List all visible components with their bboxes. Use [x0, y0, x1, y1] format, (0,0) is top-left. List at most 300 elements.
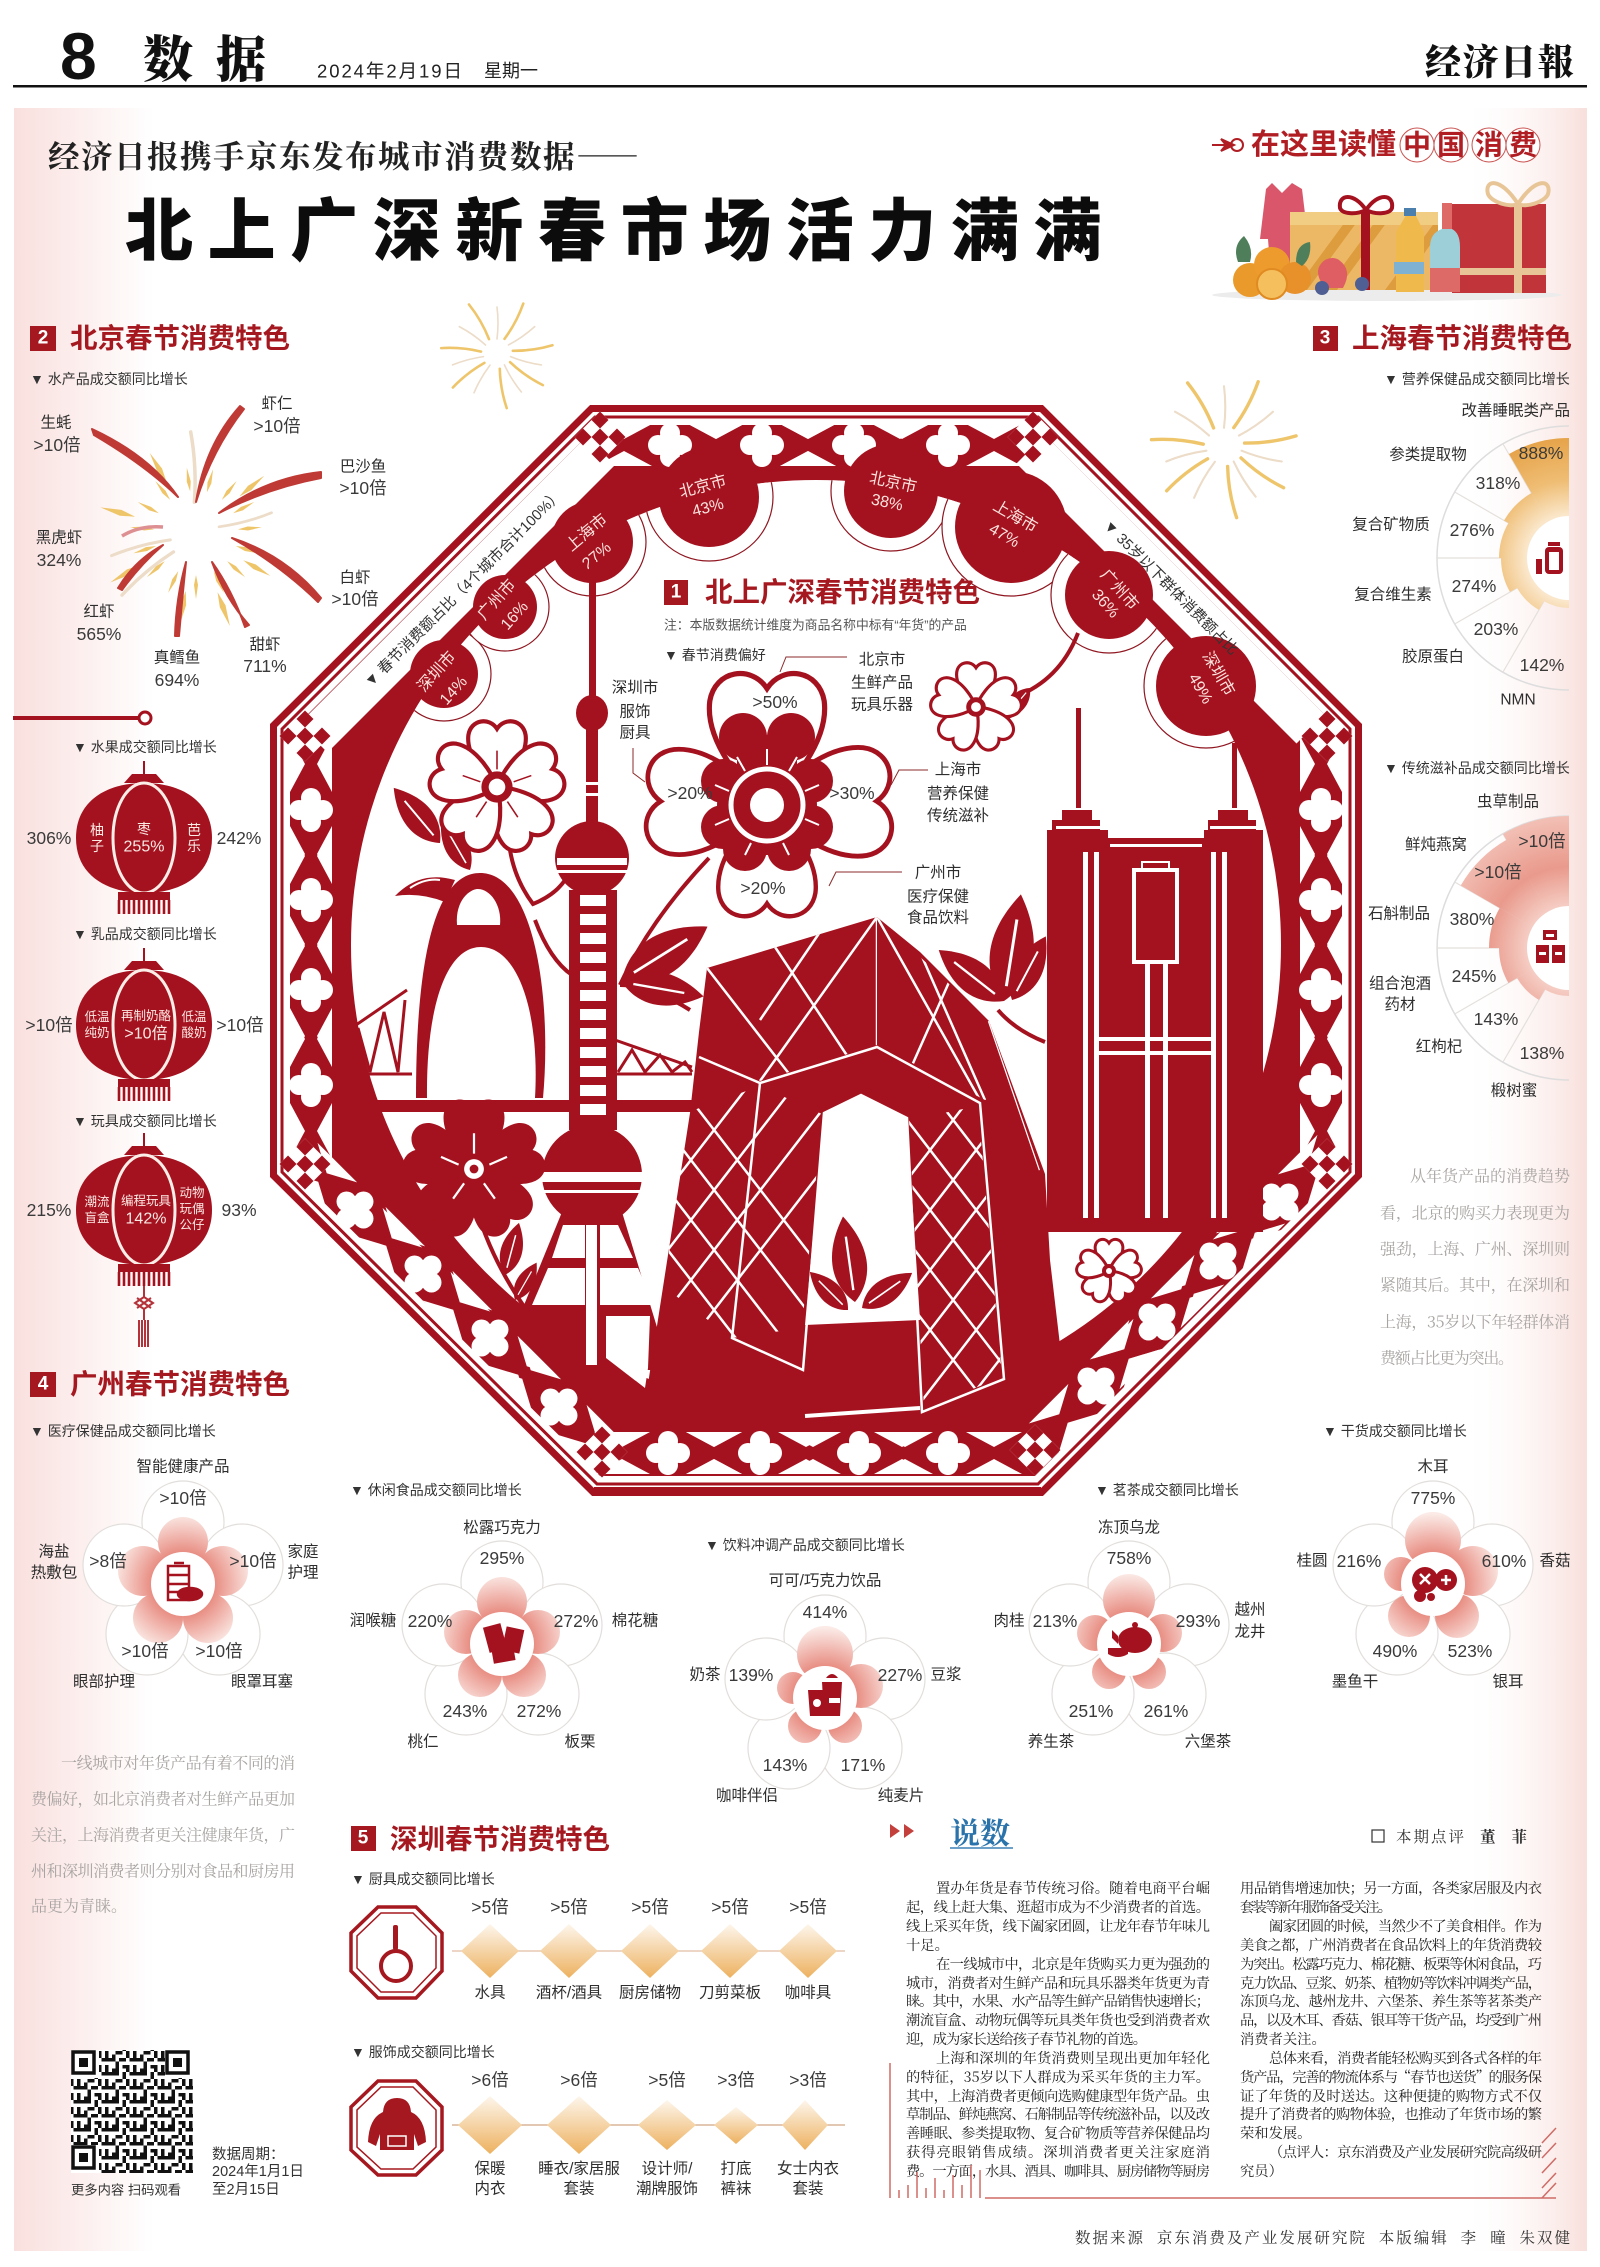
apparel row: >3倍	[717, 2070, 755, 2090]
values and labels: 142%	[1520, 655, 1564, 675]
kitchenware row: 刀剪菜板	[699, 1984, 761, 2002]
apparel row: >6倍	[560, 2070, 598, 2090]
text block: trend summary: 上海，35岁以下年轻群体消	[1380, 1310, 1570, 1332]
data period	[212, 2146, 304, 2198]
labels: 216%	[1337, 1551, 1381, 1571]
commentary column 2: （点评人：京东消费及产业发展研究院高级研	[1269, 2142, 1542, 2162]
apparel row: 套装	[563, 2180, 595, 2198]
values and labels: 245%	[1452, 966, 1496, 986]
scallop: Guangzhou 36%: 广州市	[1097, 566, 1142, 614]
kitchenware row	[452, 1897, 845, 2002]
scallop: Beijing 38%	[844, 444, 938, 538]
lantern: toys: 编程玩具	[121, 1193, 171, 1208]
commentary column 2: 用品销售增速加快；另一方面，各类家居服及内衣	[1240, 1878, 1542, 1898]
text block: preferences summary: 关注，上海消费者更关注健康年货，广	[31, 1822, 295, 1846]
labels: 可可/巧克力饮品	[769, 1572, 881, 1590]
labels: 智能健康产品	[136, 1458, 230, 1476]
commentary column 1: 迎，成为家长送给孩子春节礼物的首选。	[906, 2029, 1147, 2049]
labels: 243%	[443, 1701, 487, 1721]
newspaper logo: 经济日報	[1425, 34, 1575, 86]
lantern: toys: 142%	[126, 1210, 166, 1228]
flower chart: tea	[993, 1518, 1266, 1750]
flower callouts: 营养保健	[927, 784, 989, 802]
commentary column 1: 起，线上赶大集、逛超市成为不少消费者的首选。	[906, 1897, 1210, 1917]
labels: >10倍	[121, 1641, 169, 1661]
icon: dried mushrooms	[1412, 1567, 1457, 1602]
flower values: >20%	[667, 783, 713, 803]
labels: 护理	[287, 1564, 319, 1582]
labels: 热敷包	[31, 1562, 77, 1582]
labels: 171%	[841, 1755, 885, 1775]
slogan: read China consumption: 在这里读懂	[1251, 128, 1396, 161]
values and labels: 参类提取物	[1389, 446, 1467, 464]
apparel row: 女士内衣	[777, 2158, 839, 2178]
apparel row: 打底	[720, 2160, 752, 2178]
flower values: >30%	[829, 783, 875, 803]
lantern: toys: 公仔	[179, 1218, 205, 1232]
values and labels: 276%	[1450, 520, 1494, 540]
values and labels: 复合维生素	[1354, 586, 1432, 604]
lantern: fruit	[27, 761, 261, 914]
commentary column 1: 获得亮眼销售成绩。深圳消费者更关注家庭消	[906, 2142, 1210, 2162]
section heading 5: Shenzhen: 5	[358, 1828, 369, 1848]
scallop: Beijing 43%: 北京市	[677, 472, 728, 501]
labels: 养生茶	[1028, 1732, 1075, 1750]
flower chart: dried goods	[1296, 1458, 1571, 1690]
data period: 2024年1月1日	[212, 2163, 304, 2180]
scallop outlines	[414, 480, 1234, 749]
kitchenware row: 咖啡具	[785, 1984, 831, 2002]
labels: 295%	[480, 1548, 524, 1568]
kitchenware row: >5倍	[631, 1897, 669, 1917]
icon: teapot	[1108, 1622, 1152, 1657]
penguin	[395, 873, 545, 1098]
values and labels: 胶原蛋白	[1402, 648, 1464, 666]
labels: 家庭	[287, 1542, 319, 1560]
kitchenware row: >5倍	[550, 1897, 588, 1917]
slogan: read China consumption	[1212, 128, 1540, 162]
top lattice border	[596, 423, 1022, 467]
commentary frame ornaments	[890, 2063, 1556, 2198]
lantern: toys: 动物	[179, 1186, 205, 1200]
main title: 北上广深新春市场活力满满	[125, 194, 1116, 270]
strip label right: ▼ 35岁以下群体消费额占比	[1100, 517, 1241, 658]
scallop: Guangzhou 36%: 36%	[1088, 586, 1122, 622]
subheading: tea: ▼ 茗茶成交额同比增长	[1095, 1482, 1239, 1498]
labels: 松露巧克力	[463, 1518, 541, 1536]
section heading 3: Shanghai: 3	[1320, 328, 1330, 348]
commentary column 2: 套装等新年服饰备受关注。	[1240, 1897, 1392, 1917]
values and labels: 鲜炖燕窝	[1405, 836, 1467, 854]
slogan: read China consumption: 中	[1403, 130, 1431, 160]
scallop: Shenzhen 49%: 深圳市	[1199, 648, 1238, 699]
scallop: Shenzhen 14%: 深圳市	[414, 648, 459, 696]
values and labels: 380%	[1450, 909, 1494, 929]
commentary byline	[1372, 1825, 1543, 1847]
labels: 523%	[1448, 1641, 1492, 1661]
values and labels: 复合矿物质	[1352, 516, 1430, 534]
labels: 桃仁	[407, 1732, 439, 1750]
commentary column 1: 十足。	[906, 1935, 949, 1955]
flower callouts	[612, 650, 989, 926]
values and labels: 椴树蜜	[1491, 1082, 1537, 1100]
weekday: 星期一	[484, 61, 538, 81]
subheading: beverages: ▼ 饮料冲调产品成交额同比增长	[705, 1537, 905, 1553]
scallop: Shanghai 47%: 上海市	[990, 497, 1041, 536]
values and labels: 虫草制品	[1477, 792, 1539, 810]
labels: 咖啡伴侣	[716, 1786, 778, 1804]
labels: 纯麦片	[878, 1786, 924, 1804]
outline flower right	[928, 663, 1024, 754]
flower values: >50%	[752, 692, 798, 712]
lantern: toys	[27, 1133, 257, 1286]
labels: 565%	[77, 624, 121, 644]
lantern connector	[13, 712, 151, 724]
flower chart: snacks	[350, 1518, 658, 1750]
labels: 香菇	[1539, 1552, 1571, 1570]
labels: 木耳	[1417, 1458, 1449, 1476]
apparel row: >5倍	[648, 2070, 686, 2090]
subheading: dried goods: ▼ 干货成交额同比增长	[1323, 1423, 1467, 1439]
labels: 711%	[243, 656, 287, 676]
text block: trend summary: 紧随其后。其中，在深圳和	[1380, 1272, 1570, 1296]
small flower bottom-right	[1075, 1239, 1143, 1305]
values and labels: 143%	[1474, 1009, 1518, 1029]
lantern: dairy: 酸奶	[181, 1025, 207, 1040]
commentary column 2	[1240, 1878, 1543, 2181]
values and labels: 888%	[1519, 443, 1563, 463]
footer credits: 数据来源 京东消费及产业发展研究院 本版编辑 李 曈 朱双健	[1075, 2226, 1570, 2248]
kitchenware row: 厨房储物	[619, 1984, 681, 2002]
lantern: fruit: 柚	[90, 822, 104, 838]
red base with circular cut	[290, 425, 1342, 1476]
labels: 奶茶	[689, 1666, 721, 1684]
labels: 227%	[878, 1665, 922, 1685]
lantern: dairy: 低温	[84, 1010, 110, 1024]
apparel row: 套装	[792, 2180, 824, 2198]
subheading: medical: ▼ 医疗保健品成交额同比增长	[30, 1423, 216, 1439]
labels: 越州	[1234, 1600, 1266, 1618]
labels: 139%	[729, 1665, 773, 1685]
corner checkers	[280, 412, 1352, 1477]
CCTV building	[648, 917, 1060, 1418]
apparel row: 内衣	[474, 2180, 506, 2198]
labels: >10倍	[331, 589, 379, 609]
text block: trend summary	[1380, 1164, 1570, 1368]
polar chart: tonics	[1368, 792, 1569, 1100]
flower values: >20%	[740, 878, 786, 898]
kitchenware row: >5倍	[711, 1897, 749, 1917]
flower callouts: 医疗保健	[907, 888, 969, 906]
lantern: fruit: 255%	[124, 838, 164, 856]
section name: 数据	[143, 20, 289, 92]
labels: 巴沙鱼	[340, 458, 386, 476]
scallop: Shenzhen 49%: 49%	[1185, 671, 1215, 707]
commentary column 1: 费。一方面，水具、酒具、咖啡具、厨房储物等厨房	[906, 2161, 1210, 2181]
commentary heading: 说数	[950, 1809, 1010, 1853]
apparel row: 设计师/	[642, 2160, 693, 2178]
commentary column 1: 在一线城市中，北京是年货购买力更为强劲的	[936, 1954, 1210, 1974]
icon: bottle	[1536, 542, 1563, 574]
labels: 桂圆	[1296, 1552, 1328, 1570]
text block: preferences summary: 州和深圳消费者则分别对食品和厨房用	[31, 1858, 295, 1882]
page number: 8	[60, 19, 97, 93]
text block: preferences summary: 品更为青睐。	[31, 1894, 127, 1916]
text block: preferences summary: 一线城市对年货产品有着不同的消	[61, 1750, 295, 1774]
labels: 豆浆	[930, 1666, 962, 1684]
subheading: traditional tonics: ▼ 传统滋补品成交额同比增长	[1384, 760, 1570, 776]
flower callouts: 生鲜产品	[851, 674, 913, 692]
commentary column 2: 总体来看，消费者能轻松购买到各式各样的年	[1269, 2048, 1542, 2068]
labels: 墨鱼干	[1332, 1672, 1378, 1690]
bridge	[352, 990, 692, 1112]
QR code	[71, 2050, 193, 2173]
values and labels: 组合泡酒	[1369, 974, 1431, 992]
date: 2024年2月19日	[317, 60, 462, 82]
labels	[689, 1572, 962, 1804]
labels: 610%	[1482, 1551, 1526, 1571]
flower callouts: 服饰	[619, 702, 651, 720]
commentary column 2: 消费者关注。	[1240, 2029, 1326, 2049]
labels: 324%	[37, 550, 81, 570]
pearl tower	[522, 560, 670, 1388]
subheading: preference: ▼ 春节消费偏好	[664, 647, 766, 663]
values and labels: 红枸杞	[1416, 1038, 1462, 1056]
labels: 海盐	[38, 1542, 70, 1560]
labels	[993, 1518, 1266, 1750]
labels	[1296, 1458, 1571, 1690]
labels: >10倍	[195, 1641, 243, 1661]
flower callouts: 厨具	[619, 724, 651, 742]
commentary column 2: 美食之都，广州消费者在食品饮料上的年货消费较	[1240, 1935, 1543, 1955]
lantern: fruit: 242%	[217, 828, 261, 848]
flower callouts: 北京市	[859, 650, 905, 668]
values and labels: 203%	[1474, 619, 1518, 639]
labels: 红虾	[83, 602, 115, 620]
scallop: Shanghai 47%	[955, 471, 1067, 583]
stems and leaves	[474, 633, 1078, 1315]
scallop: Beijing 38%: 38%	[870, 491, 904, 515]
lantern: dairy: 纯奶	[84, 1026, 110, 1040]
labels: 白虾	[339, 568, 371, 586]
commentary column 2: 克力饮品、豆浆、奶茶、植物奶等饮料冲调类产品，	[1240, 1973, 1542, 1993]
subheading: fruit: ▼ 水果成交额同比增长	[73, 739, 217, 755]
apparel row	[452, 2070, 845, 2198]
commentary column 2: 阖家团圆的时候，当然少不了美食相伴。作为	[1269, 1916, 1542, 1936]
firework right	[1151, 382, 1296, 518]
scallop: Guangzhou 16%: 广州市	[474, 576, 519, 624]
labels: >10倍	[253, 416, 301, 436]
labels: 虾仁	[261, 394, 293, 412]
lantern: toys: 玩偶	[179, 1202, 205, 1216]
commentary column 1: 的特征，35岁以下人群成为采买年货的主力军。	[906, 2067, 1210, 2087]
lantern: toys: 93%	[221, 1200, 257, 1220]
commentary byline: 董菲	[1480, 1825, 1543, 1847]
text block: trend summary: 看，北京的购买力表现更为	[1380, 1200, 1570, 1224]
labels	[350, 1518, 658, 1750]
commentary column 1: 其中，上海消费者更倾向选购健康型年货产品。虫	[906, 2086, 1211, 2106]
commentary column 1: 线上采买年货，线下阖家团圆，让龙年春节年味儿	[906, 1916, 1210, 1936]
flower callouts: 玩具乐器	[851, 696, 913, 714]
slogan: read China consumption: 消	[1475, 130, 1503, 160]
commentary column 1: 上海和深圳的年货消费则呈现出更加年轻化	[936, 2048, 1210, 2068]
outline flower left	[426, 721, 568, 857]
values and labels: >10倍	[1518, 831, 1566, 851]
flower callouts: 传统滋补	[927, 806, 989, 824]
labels: 251%	[1069, 1701, 1113, 1721]
scallop: Beijing 43%: 43%	[690, 496, 726, 520]
leaves	[383, 682, 1058, 1304]
labels: 真鳕鱼	[154, 648, 200, 666]
labels: 414%	[803, 1602, 847, 1622]
apparel row: >6倍	[471, 2070, 509, 2090]
values and labels: >10倍	[1474, 862, 1522, 882]
values and labels: 石斛制品	[1368, 904, 1430, 922]
icon: hoodie badge	[351, 2081, 442, 2175]
commentary byline: 本期点评	[1396, 1825, 1466, 1847]
commentary column 1: 置办年货是春节传统习俗。随着电商平台崛	[936, 1878, 1210, 1898]
commentary column 1: 睐。其中，水果、水产品等生鲜产品销售快速增长；	[906, 1991, 1210, 2011]
labels: 261%	[1144, 1701, 1188, 1721]
scallop: Guangzhou 36%	[1065, 551, 1153, 639]
lantern: dairy: >10倍	[25, 1015, 73, 1035]
slogan: read China consumption: 国	[1437, 130, 1465, 160]
labels: >10倍	[33, 435, 81, 455]
scallop: Shenzhen 14%: 14%	[437, 673, 471, 709]
commentary column 1: 潮流盲盒、动物玩偶等玩具类年货也受到消费者欢	[906, 2010, 1210, 2030]
firework chart: aquatic products	[33, 394, 387, 690]
subheading: apparel: ▼ 服饰成交额同比增长	[351, 2044, 495, 2060]
labels: 272%	[517, 1701, 561, 1721]
labels	[31, 1458, 319, 1690]
labels: 272%	[554, 1611, 598, 1631]
labels: >10倍	[159, 1488, 207, 1508]
lantern: toys: 潮流	[84, 1194, 110, 1209]
values and labels: NMN	[1500, 692, 1536, 708]
labels: 冻顶乌龙	[1098, 1518, 1160, 1536]
labels: 758%	[1107, 1548, 1151, 1568]
subheading: dairy: ▼ 乳品成交额同比增长	[73, 926, 217, 942]
commentary column 1	[906, 1878, 1211, 2181]
text block: trend summary: 强劲，上海、广州、深圳则	[1380, 1236, 1570, 1260]
kitchenware row: >5倍	[789, 1897, 827, 1917]
labels: 肉桂	[993, 1612, 1025, 1630]
commentary column 2: 究员）	[1240, 2161, 1283, 2181]
kitchenware row: >5倍	[471, 1897, 509, 1917]
labels: 眼罩耳塞	[231, 1672, 293, 1690]
left lattice border	[289, 736, 333, 1159]
text block: preferences summary	[31, 1750, 295, 1916]
polar chart: nutrition	[1352, 402, 1570, 708]
text block: preferences summary: 费偏好，如北京消费者对生鲜产品更加	[31, 1786, 295, 1810]
commentary column 1: 草制品、鲜炖燕窝、石斛制品等传统滋补品，以及改	[906, 2104, 1210, 2124]
lantern: fruit: 子	[90, 838, 104, 854]
subheading: nutrition: ▼ 营养保健品成交额同比增长	[1384, 371, 1570, 387]
commentary column 2: 证了年货的及时送达。这种便捷的购物方式不仅	[1240, 2086, 1542, 2106]
lantern: toys: 盲盒	[84, 1210, 110, 1225]
lantern knot and tassel	[135, 1286, 153, 1347]
section heading 2: Beijing: 北京春节消费特色	[70, 322, 290, 354]
flower chart: medical	[31, 1458, 319, 1690]
labels: 棉花糖	[612, 1612, 658, 1630]
masthead	[13, 19, 1587, 93]
data period: 数据周期：	[212, 2146, 284, 2163]
flower values	[667, 692, 875, 898]
red flower lower-left	[398, 1099, 550, 1243]
text block: trend summary: 费额占比更为突出。	[1380, 1346, 1514, 1368]
flower callouts: 广州市	[915, 864, 961, 882]
scallop: Shenzhen 49%	[1156, 636, 1256, 736]
values and labels: 318%	[1476, 473, 1520, 493]
labels: 490%	[1373, 1641, 1417, 1661]
scallop: Shanghai 27%	[551, 501, 633, 583]
labels: 143%	[763, 1755, 807, 1775]
lower-left lattice border	[287, 1142, 627, 1475]
section heading 1: 北上广深春节消费特色	[705, 576, 980, 608]
commentary column 2: 货产品，完善的物流体系与“春节也送货”的服务保	[1240, 2067, 1542, 2087]
lantern: dairy: 再制奶酪	[121, 1008, 171, 1023]
labels: 生蚝	[40, 414, 72, 432]
right lattice border	[1299, 736, 1343, 1159]
flower chart: beverages	[689, 1572, 962, 1804]
QR caption: 更多内容 扫码观看	[71, 2182, 181, 2198]
commentary column 1: 城市，消费者对生鲜产品和玩具乐器类年货更为青	[906, 1973, 1210, 1993]
section heading 3: Shanghai: 上海春节消费特色	[1352, 322, 1572, 354]
values and labels	[1368, 792, 1566, 1100]
values and labels: 274%	[1452, 576, 1496, 596]
labels: 694%	[155, 670, 199, 690]
lantern: dairy: 低温	[181, 1010, 207, 1024]
lantern: toys: 215%	[27, 1200, 71, 1220]
icon: red packets	[483, 1623, 524, 1664]
data period: 至2月15日	[212, 2182, 280, 2198]
lantern: fruit: 芭	[187, 822, 201, 838]
labels: 213%	[1033, 1611, 1077, 1631]
section heading 4: Guangzhou: 广州春节消费特色	[70, 1368, 290, 1400]
subtitle: 经济日报携手京东发布城市消费数据——	[48, 132, 641, 178]
illustration: gifts	[1212, 183, 1562, 301]
labels: 775%	[1411, 1488, 1455, 1508]
section heading 4: Guangzhou: 4	[38, 1374, 49, 1394]
apparel row: 裤袜	[720, 2180, 752, 2198]
apparel row: 潮牌服饰	[636, 2180, 698, 2198]
commentary column 2: 品，以及木耳、香菇、银耳等干货产品，均受到广州	[1240, 2010, 1542, 2030]
paper-cut octagon	[274, 408, 1358, 1496]
scallop: Shanghai 27%: 上海市	[563, 510, 611, 555]
scallop: Beijing 43%	[659, 447, 759, 547]
values and labels	[1352, 402, 1570, 708]
kitchenware row: 酒杯/酒具	[536, 1984, 602, 2002]
labels: 黑虎虾	[36, 528, 82, 546]
subheading: kitchenware: ▼ 厨具成交额同比增长	[351, 1871, 495, 1887]
scallop: Shanghai 27%: 27%	[579, 539, 615, 573]
commentary column 1: 善睡眠、参类提取物、复合矿物质等营养保健品均	[906, 2123, 1210, 2143]
kitchenware row: 水具	[474, 1984, 506, 2002]
subheading: aquatic: ▼ 水产品成交额同比增长	[30, 371, 188, 387]
labels: 220%	[408, 1611, 452, 1631]
apparel row: 保暖	[474, 2160, 506, 2178]
scallop: Shenzhen 14%	[410, 640, 478, 709]
lower-right lattice border	[1028, 1134, 1348, 1454]
values and labels: 药材	[1384, 996, 1416, 1014]
section heading 2: Beijing: 2	[38, 328, 48, 348]
twin-tower building	[1047, 708, 1263, 1232]
note: 注：本版数据统计维度为商品名称中标有“年货”的产品	[664, 618, 967, 632]
label strip upper-left	[299, 436, 615, 752]
small firework left	[441, 304, 553, 408]
main flower chart	[645, 674, 893, 916]
labels: >10倍	[339, 478, 387, 498]
